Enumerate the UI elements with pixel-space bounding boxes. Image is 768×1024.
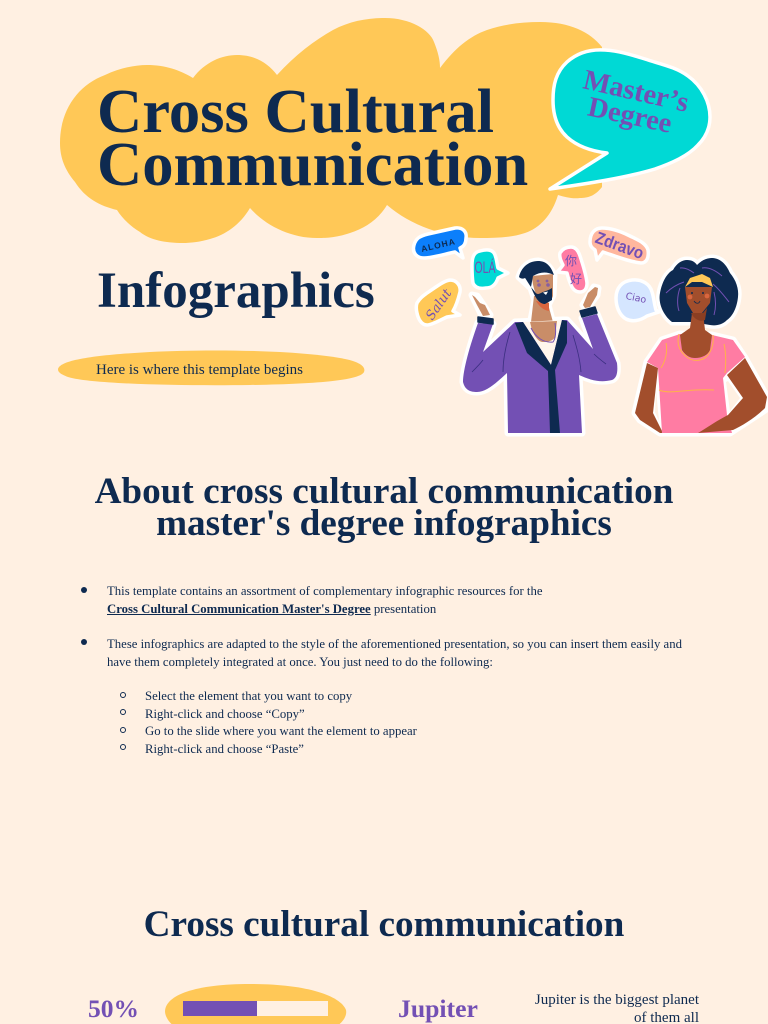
bubble: Ola: OLÁ (474, 258, 496, 277)
step marker 2 (120, 709, 126, 715)
paragraph 1: Cross Cultural Communication Master's Degree presentation (107, 602, 436, 616)
lapels (515, 320, 567, 433)
headband (685, 274, 713, 287)
chest (530, 321, 557, 342)
face details (537, 280, 550, 287)
gap between right arm and torso (726, 381, 740, 411)
step marker 3 (120, 727, 126, 733)
neck and chest (680, 313, 712, 358)
neck (531, 296, 553, 322)
bubble: Chinese greeting: 你 (565, 252, 577, 269)
paragraph 2: have them completely integrated at once. You just need to do the following: (107, 655, 493, 669)
section heading: about: master's degree infographics (156, 503, 612, 544)
neck shadow (536, 301, 549, 311)
bubble: Salut (416, 280, 460, 325)
description: Jupiter: Jupiter is the biggest planet (535, 992, 699, 1008)
title (97, 76, 528, 199)
bubble: Ciao (616, 280, 659, 321)
white shirt (523, 320, 562, 365)
steps list: Right-click and choose “Paste” (145, 742, 304, 756)
cardigan (463, 314, 617, 433)
hair strands (666, 268, 729, 315)
steps list: Go to the slide where you want the element to appear (145, 724, 417, 738)
header illustration (60, 18, 768, 436)
bubble: Ciao: Ciao (625, 291, 647, 306)
bubble: Salut: Salut (423, 286, 456, 323)
face shadow (691, 308, 707, 321)
hands (472, 287, 598, 316)
section heading: cross cultural communication: Cross cultural communication (144, 904, 624, 945)
gap between left arm and torso (655, 390, 659, 421)
steps list: Right-click and choose “Copy” (145, 707, 305, 721)
beard (531, 287, 552, 304)
description: Jupiter (535, 992, 699, 1024)
face (685, 287, 712, 313)
label: Jupiter: Jupiter (398, 994, 478, 1023)
bubble: Zdravo: Zdravo (593, 228, 646, 263)
step marker 4 (120, 744, 126, 750)
man white outline (463, 261, 617, 433)
percentage: 50% (88, 994, 139, 1023)
woman white outline (635, 258, 767, 433)
tagline text: Here is where this template begins (96, 362, 303, 378)
intro list (81, 584, 682, 756)
man illustration (463, 261, 617, 433)
bubble: Aloha: ALOHA (420, 236, 457, 254)
subtitle: Infographics (97, 263, 375, 319)
section heading: about: About cross cultural communication (95, 471, 673, 512)
left arm (635, 363, 663, 433)
section heading: about (95, 471, 673, 544)
paragraph 1: This template contains an assortment of complementary infographic resources for the (107, 584, 542, 598)
necklace (531, 323, 556, 342)
bullet 2 (81, 639, 87, 645)
steps list: Select the element that you want to copy (145, 689, 352, 703)
paragraph 2 (107, 637, 682, 669)
title: Cross Cultural (97, 76, 494, 146)
bubble: Ola (472, 250, 508, 288)
title: Communication (97, 129, 528, 199)
mouth (543, 292, 548, 295)
paragraph 1 (107, 584, 542, 616)
progress pill (165, 984, 346, 1024)
step marker 1 (120, 692, 126, 698)
bubble label: Master’s (580, 65, 692, 119)
pink shirt (647, 334, 745, 433)
woman illustration (635, 258, 767, 433)
bubble: Aloha (413, 228, 466, 258)
tagline pill (58, 350, 364, 385)
title cloud blob (60, 18, 602, 243)
bubble: Chinese greeting (557, 247, 587, 292)
speech bubble: Master's Degree (550, 50, 710, 189)
cardigan folds (472, 332, 606, 372)
bubble label: Degree (585, 92, 675, 140)
right arm (698, 358, 767, 433)
bullet 1 (81, 587, 87, 593)
shirt seams (659, 334, 726, 392)
face details (688, 292, 709, 303)
face (532, 274, 553, 301)
paragraph 2: These infographics are adapted to the style of the aforementioned presentation, so you can insert them easily and (107, 637, 682, 651)
steps list (145, 689, 417, 756)
hair (519, 261, 554, 287)
cuffs (478, 307, 597, 324)
bubble: Chinese greeting: 好 (570, 270, 582, 287)
hair (660, 258, 738, 325)
